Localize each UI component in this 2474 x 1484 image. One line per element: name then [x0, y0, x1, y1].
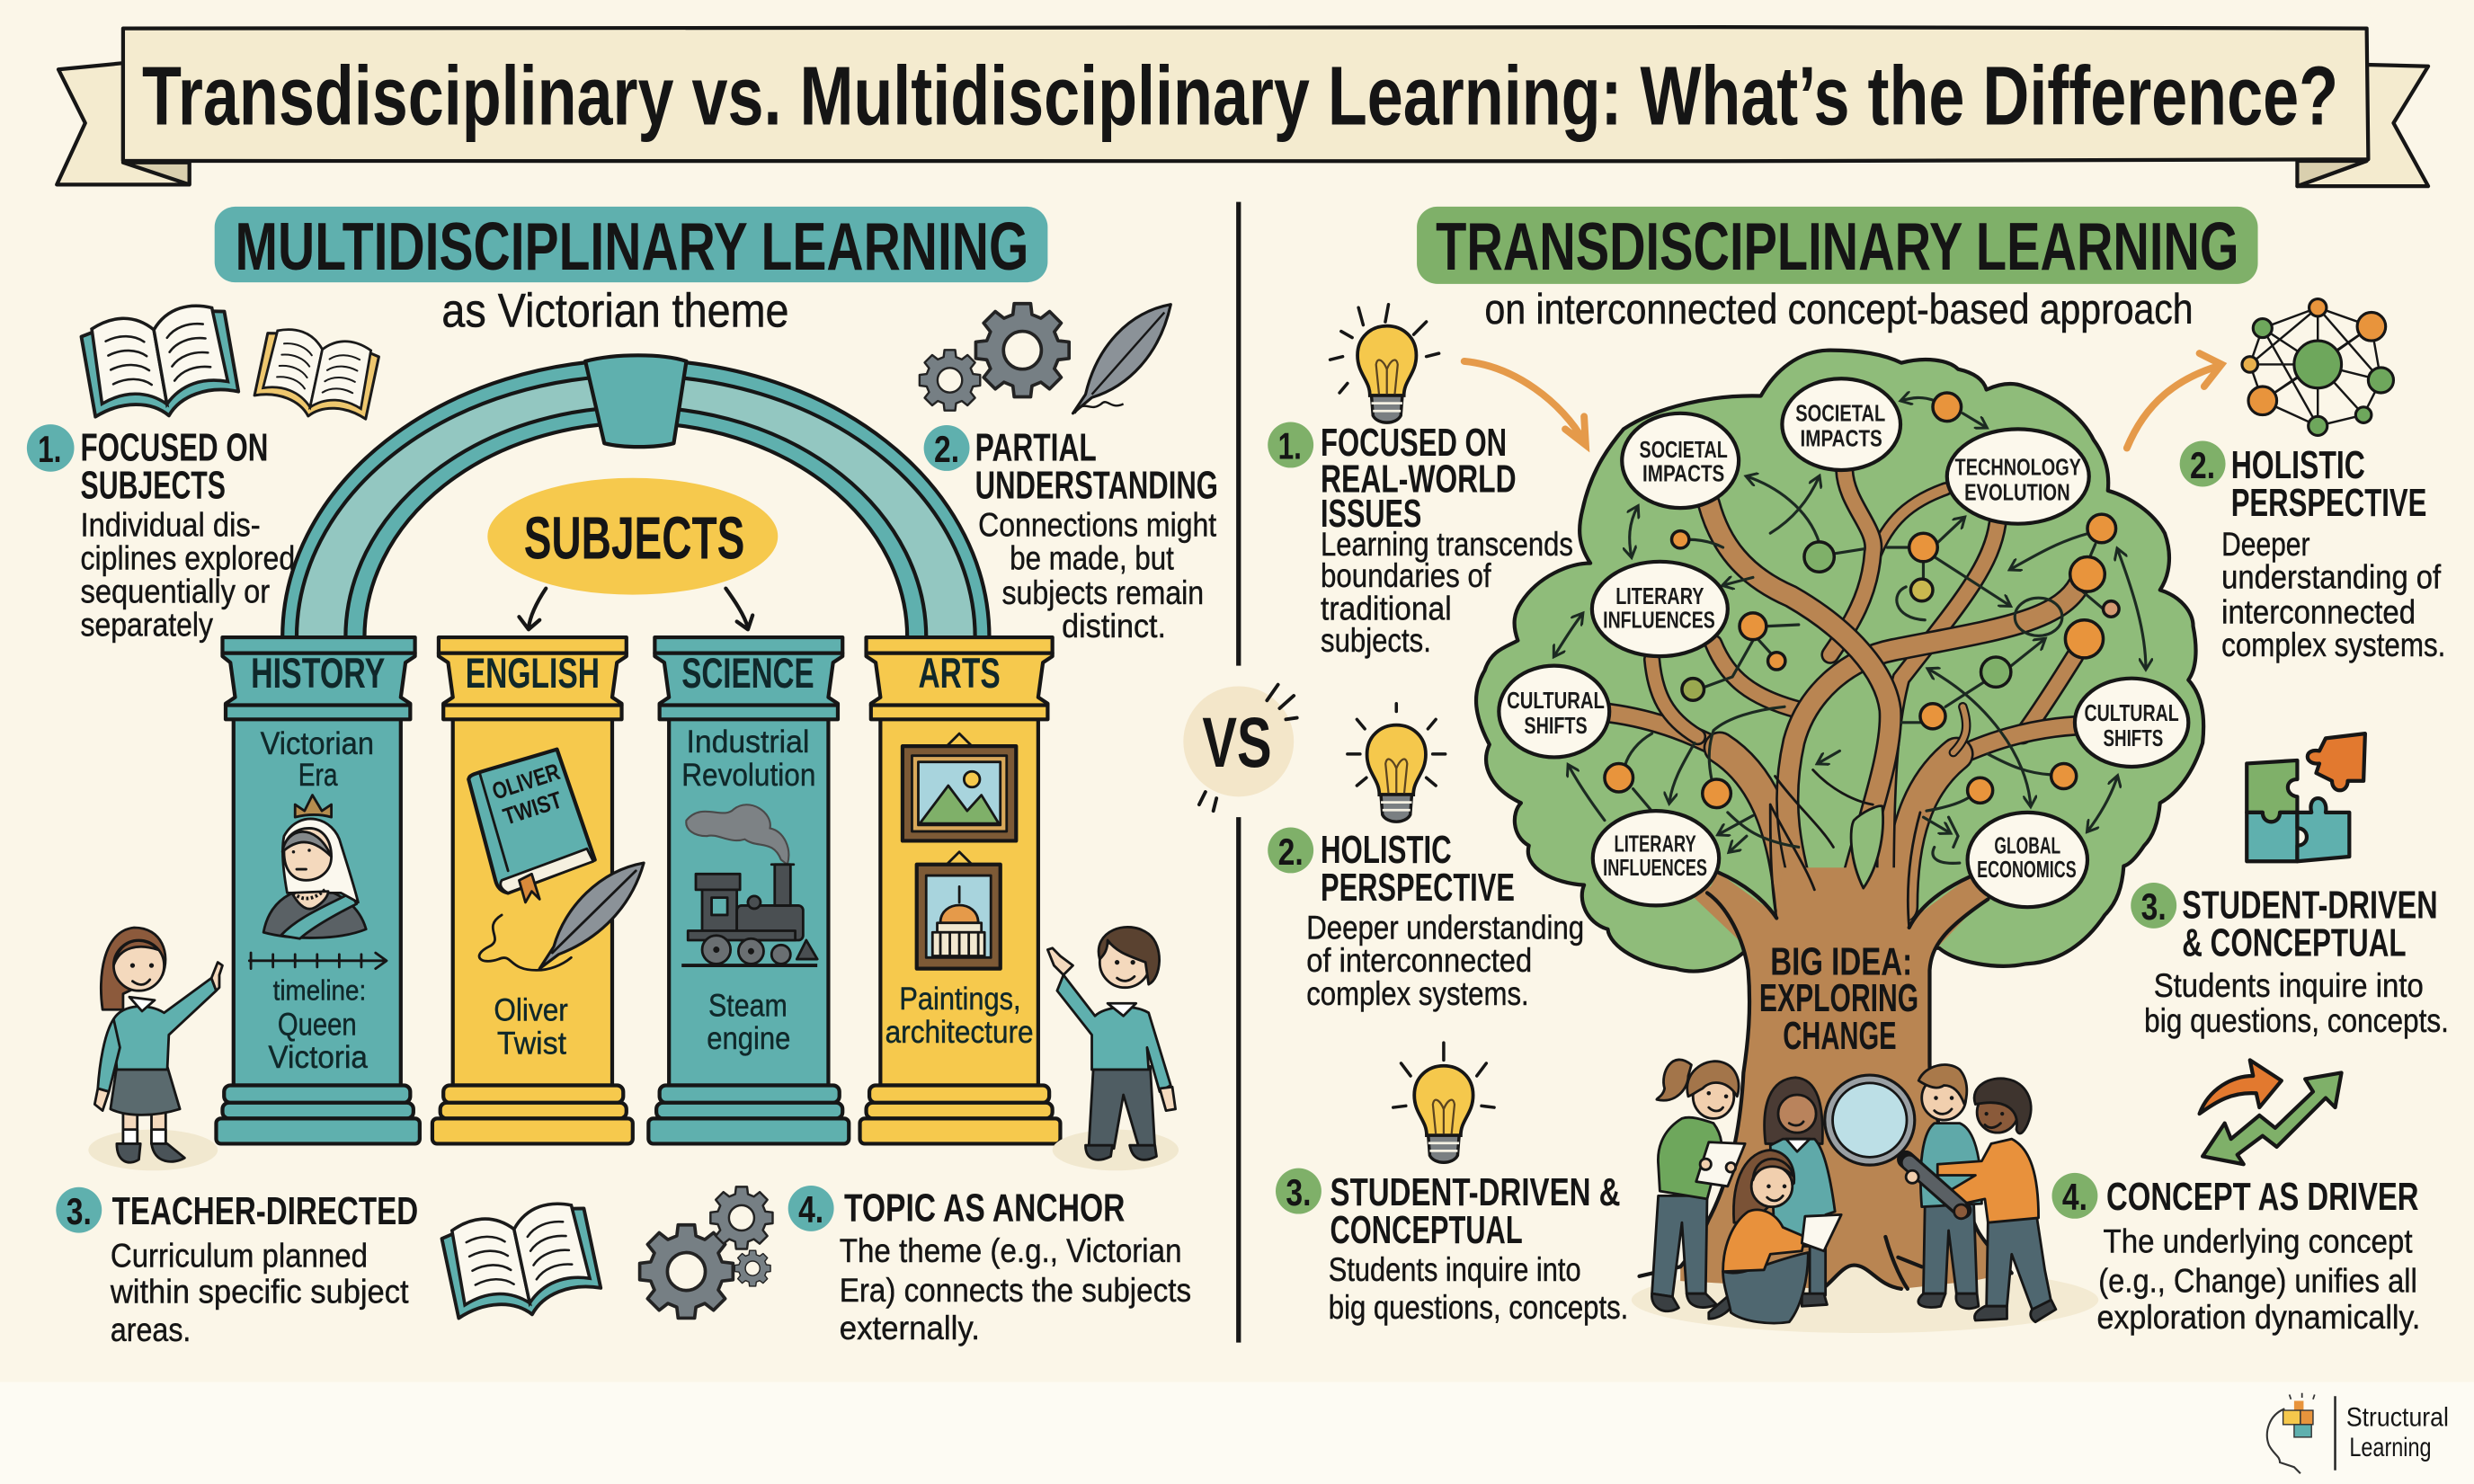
icon: gears and quill: [920, 304, 1170, 413]
point 4: topic as anchor: 4.: [798, 1188, 823, 1231]
point 1: focused on real-world issues: 1.: [1278, 425, 1302, 467]
pillar: science: Industrial: [686, 724, 809, 760]
node: global economics: ECONOMICS: [1977, 858, 2077, 883]
point 2: holistic perspective left: of interconnected: [1306, 942, 1532, 979]
point 2: partial understanding: UNDERSTANDING: [975, 464, 1218, 508]
point 2: holistic perspective left: [1268, 828, 1584, 1012]
pillar: english: ENGLISH: [466, 650, 600, 698]
point 2: holistic perspective left: PERSPECTIVE: [1321, 866, 1515, 910]
pillar: arts: architecture: [885, 1015, 1034, 1050]
panel: transdisciplinary learning: [1268, 207, 2449, 1336]
node: literary influences upper: [1592, 562, 1728, 656]
student: orange jumper: [1937, 1079, 2056, 1322]
branches: [1609, 470, 2079, 946]
icon: oliver twist book: TWIST: [500, 786, 565, 831]
logo text: Structural: [2346, 1403, 2449, 1433]
point 1: focused on subjects: SUBJECTS: [81, 464, 226, 508]
node: cultural shifts left: SHIFTS: [1524, 714, 1588, 739]
point 2: holistic perspective right: Deeper: [2221, 526, 2309, 563]
icon: framed building: [917, 852, 1001, 969]
arrow: orange out of tree: [2127, 353, 2221, 448]
node: cultural shifts right: SHIFTS: [2104, 726, 2163, 751]
child pointing: boy: [1047, 927, 1179, 1170]
pillar: history: Queen: [278, 1007, 357, 1042]
point 2: holistic perspective left: HOLISTIC: [1321, 828, 1452, 872]
point 2: partial understanding: distinct.: [1062, 608, 1166, 644]
icon: steam train: [681, 804, 817, 965]
child pointing: girl: [88, 928, 222, 1170]
node: cultural shifts right: CULTURAL: [2084, 701, 2179, 726]
pillar: arts: ARTS: [918, 650, 1001, 698]
VS badge: VS: [1202, 703, 1272, 782]
icon: open books: [79, 300, 380, 428]
title banner: [57, 27, 2428, 186]
point 1: focused on subjects: Individual dis-: [81, 507, 261, 544]
point 2: partial understanding: PARTIAL: [975, 425, 1097, 469]
icon: framed landscape: [903, 733, 1016, 840]
point 3: student-driven right: 3.: [2141, 885, 2167, 928]
pillar: science: SCIENCE: [681, 650, 814, 698]
pillar: history: HISTORY: [251, 650, 385, 698]
icon: oliver twist book: OLIVER: [489, 758, 563, 805]
icon: queen victoria: [263, 795, 366, 938]
pillar: science: Steam: [708, 988, 788, 1023]
panel: multidisciplinary learning: [27, 207, 1218, 1348]
point 2: holistic perspective right: 2.: [2190, 444, 2215, 486]
icon: light bulb 2: [1348, 704, 1446, 822]
point 2: partial understanding: subjects remain: [1001, 574, 1204, 611]
point 1: focused on real-world issues: traditional: [1321, 591, 1452, 627]
point 1: focused on real-world issues: subjects.: [1321, 622, 1431, 659]
node label: technology evolution: TECHNOLOGY: [1955, 455, 2081, 480]
point 4: topic as anchor: Era) connects the subjects: [840, 1272, 1191, 1309]
point 2: holistic perspective left: complex systems.: [1306, 975, 1529, 1012]
footer strip: [0, 1382, 2474, 1484]
pillar: english: Oliver: [494, 993, 568, 1028]
point 1: focused on real-world issues: Learning transcends: [1321, 526, 1573, 563]
student: teal jumper behind: [1765, 1078, 1835, 1306]
heading pill: MULTIDISCIPLINARY LEARNING: [236, 209, 1028, 284]
point 2: partial understanding: [924, 425, 1218, 644]
point 2: holistic perspective right: HOLISTIC: [2231, 443, 2365, 487]
logo: structural learning: [2267, 1393, 2449, 1473]
point 1: focused on real-world issues: boundaries of: [1321, 557, 1491, 594]
point 1: focused on subjects: 1.: [38, 428, 61, 470]
trunk: [1640, 769, 2012, 1289]
subheading: on interconnected concept-based approach: [1485, 286, 2194, 333]
point 4: concept as driver: exploration dynamically.: [2097, 1299, 2420, 1336]
point 1: focused on subjects: ciplines explored: [81, 540, 295, 577]
icon: puzzle: [2247, 733, 2365, 861]
point 3: student-driven left: 3.: [1286, 1171, 1311, 1213]
subheading: as Victorian theme: [441, 284, 789, 337]
point 3: student-driven right: [2131, 883, 2449, 1039]
node label: technology evolution: EVOLUTION: [1964, 480, 2070, 505]
ground shadow: [1632, 1266, 2098, 1333]
student: green jumper with paper: [1651, 1060, 1745, 1311]
pillar: history: Era: [298, 758, 338, 793]
point 4: concept as driver: 4.: [2062, 1176, 2087, 1218]
pillar: arts: [860, 637, 1060, 1143]
pillar: science: [648, 637, 849, 1143]
icon: light bulb 3: [1393, 1043, 1494, 1162]
keystone: [585, 355, 686, 447]
node: societal impacts top: [1782, 378, 1900, 470]
node: literary influences lower: [1593, 811, 1719, 905]
tree crown: [1476, 351, 2203, 971]
point 4: concept as driver: [2051, 1173, 2420, 1336]
node label: technology evolution: [1955, 455, 2081, 505]
point 3: teacher-directed: Curriculum planned: [111, 1237, 368, 1274]
point 3: student-driven left: STUDENT-DRIVEN &: [1330, 1170, 1620, 1214]
icon: book bottom: [440, 1197, 603, 1329]
node: societal impacts top: SOCIETAL: [1795, 402, 1885, 427]
node: literary influences upper: INFLUENCES: [1603, 609, 1715, 634]
node: cultural shifts left: CULTURAL: [1507, 689, 1605, 714]
node: global economics: [1968, 813, 2087, 907]
pillar: history: [216, 637, 420, 1143]
node: cultural shifts left: [1499, 666, 1609, 757]
icon: gears bottom: [640, 1186, 772, 1318]
point 3: student-driven left: [1276, 1169, 1628, 1326]
point 2: holistic perspective left: 2.: [1278, 831, 1304, 873]
pillar: english: Twist: [497, 1026, 566, 1061]
point 4: topic as anchor: externally.: [840, 1310, 980, 1346]
subjects oval: SUBJECTS: [524, 505, 744, 572]
student: crouching with paper: [1709, 1150, 1841, 1323]
trunk label: big idea: CHANGE: [1783, 1014, 1897, 1058]
node: societal impacts left: [1622, 413, 1739, 508]
point 3: teacher-directed: TEACHER-DIRECTED: [112, 1189, 418, 1233]
icon: network: [2242, 299, 2393, 435]
point 1: focused on real-world issues: ISSUES: [1321, 492, 1421, 536]
VS badge: [1183, 685, 1297, 811]
point 2: holistic perspective left: Deeper understanding: [1306, 909, 1584, 946]
point 1: focused on subjects: sequentially or: [81, 573, 270, 609]
logo text: Learning: [2349, 1433, 2432, 1462]
point 3: student-driven left: big questions, concepts.: [1329, 1289, 1628, 1326]
central gap: [1851, 806, 1883, 888]
point 1: focused on subjects: [27, 424, 295, 643]
node: technology evolution: [1947, 429, 2089, 524]
arch: [282, 355, 989, 637]
tree: [1476, 351, 2203, 1333]
point 3: student-driven right: Students inquire into: [2154, 967, 2424, 1004]
icon: oliver twist book: [468, 750, 595, 902]
point 2: partial understanding: be made, but: [1010, 540, 1174, 577]
point 2: partial understanding: 2.: [934, 428, 959, 470]
point 1: focused on real-world issues: [1268, 421, 1573, 659]
icon: quill: [479, 863, 644, 970]
subjects oval: [487, 478, 778, 595]
trunk label: big idea: BIG IDEA:: [1770, 940, 1912, 984]
point 2: partial understanding: Connections might: [978, 507, 1216, 544]
student: teal jumper: [1918, 1065, 1981, 1309]
students exploring: [1651, 1060, 2056, 1323]
node: societal impacts left: IMPACTS: [1642, 461, 1724, 486]
icon: head with blocks: [2267, 1393, 2315, 1473]
arrows from subjects: [519, 589, 752, 629]
trunk label: big idea: [1759, 940, 1918, 1058]
point 4: topic as anchor: The theme (e.g., Victorian: [840, 1232, 1182, 1269]
timeline: [249, 953, 387, 969]
node: cultural shifts right: [2075, 679, 2188, 767]
point 1: focused on real-world issues: REAL-WORLD: [1321, 458, 1517, 502]
node: societal impacts top: IMPACTS: [1801, 427, 1882, 452]
pillar: history: Victoria: [268, 1040, 368, 1075]
point 3: teacher-directed: within specific subject: [110, 1274, 409, 1311]
pillar: history: timeline:: [273, 974, 366, 1007]
node: literary influences lower: INFLUENCES: [1603, 856, 1707, 881]
point 1: focused on subjects: FOCUSED ON: [81, 425, 268, 469]
point 1: focused on subjects: separately: [81, 606, 213, 643]
point 3: student-driven left: Students inquire into: [1329, 1251, 1581, 1288]
point 4: concept as driver: The underlying concept: [2104, 1223, 2413, 1260]
pillar: science: engine: [707, 1021, 790, 1056]
arrow: orange into tree: [1464, 361, 1586, 445]
node: literary influences lower: LITERARY: [1614, 832, 1696, 858]
point 3: teacher-directed: areas.: [111, 1311, 191, 1348]
trunk label: big idea: EXPLORING: [1759, 976, 1918, 1020]
pillar: arts: Paintings,: [899, 982, 1021, 1017]
point 1: focused on real-world issues: FOCUSED ON: [1321, 421, 1507, 465]
logo text: [2346, 1403, 2449, 1462]
node: global economics: GLOBAL: [1994, 833, 2060, 858]
point 3: teacher-directed: 3.: [67, 1190, 92, 1232]
pillar: science: Revolution: [681, 758, 815, 793]
point 2: holistic perspective right: interconnected: [2221, 593, 2416, 630]
connecting arrows: [1554, 397, 2146, 863]
icon: light bulb 1: [1330, 305, 1439, 422]
icon: change arrows: [2200, 1060, 2342, 1164]
point 2: holistic perspective right: understanding of: [2221, 559, 2442, 596]
pillar: english: [432, 637, 644, 1143]
orange and green nodes: [1605, 393, 2119, 808]
point 3: teacher-directed: [56, 1187, 418, 1348]
center divider: [1237, 202, 1240, 1343]
point 3: student-driven left: CONCEPTUAL: [1330, 1208, 1523, 1252]
node: literary influences upper: LITERARY: [1615, 584, 1704, 609]
point 4: topic as anchor: TOPIC AS ANCHOR: [844, 1186, 1125, 1230]
point 4: topic as anchor: [788, 1186, 1191, 1346]
point 4: concept as driver: (e.g., Change) unifies all: [2098, 1262, 2417, 1299]
point 2: holistic perspective right: [2180, 441, 2445, 663]
node: societal impacts left: SOCIETAL: [1640, 438, 1728, 463]
pillar: history: Victorian: [261, 726, 374, 761]
icon: magnifying glass: [1825, 1075, 1968, 1219]
